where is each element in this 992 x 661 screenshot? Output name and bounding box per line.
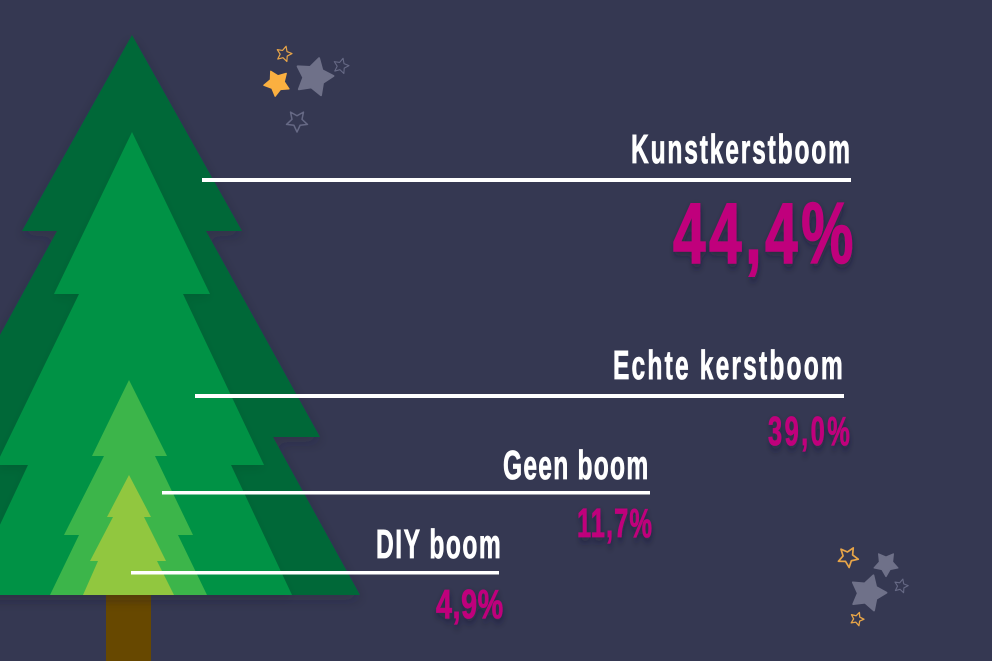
value: 4,9% [436,582,503,627]
star: orange outline [275,44,293,62]
stars: bottom group [835,543,909,627]
leader line [202,178,851,182]
entry: Echte kerstboom [195,343,850,455]
tree illustration [0,35,360,661]
label: DIY boom [376,522,501,568]
entry: Geen boom [162,443,652,547]
star: grey filled large [847,570,890,612]
star: orange outline large [835,543,862,569]
tree: DIY boom [83,475,174,595]
label: Echte kerstboom [613,343,843,389]
star: grey outline lower [283,106,312,134]
star: large grey [292,53,337,97]
leader line [195,394,844,398]
entry: DIY boom [131,522,503,627]
star: grey outline right [332,56,350,74]
leader line [162,491,650,494]
value: 44,4% [673,185,853,282]
tree: Echte kerstboom [0,132,292,595]
tree: Kunstkerstboom [0,35,360,595]
tree: Geen boom [50,380,207,595]
entry: Kunstkerstboom [202,127,853,282]
value: 39,0% [768,409,850,455]
tree trunk [106,595,151,661]
star: grey filled small [870,547,903,579]
value: 11,7% [577,501,652,547]
star: orange filled [260,65,293,98]
label: Kunstkerstboom [631,127,850,173]
star: orange outline small [849,610,866,627]
star: grey outline [893,577,909,593]
stars: top group [260,44,350,134]
label: Geen boom [503,443,648,489]
leader line [131,571,499,574]
